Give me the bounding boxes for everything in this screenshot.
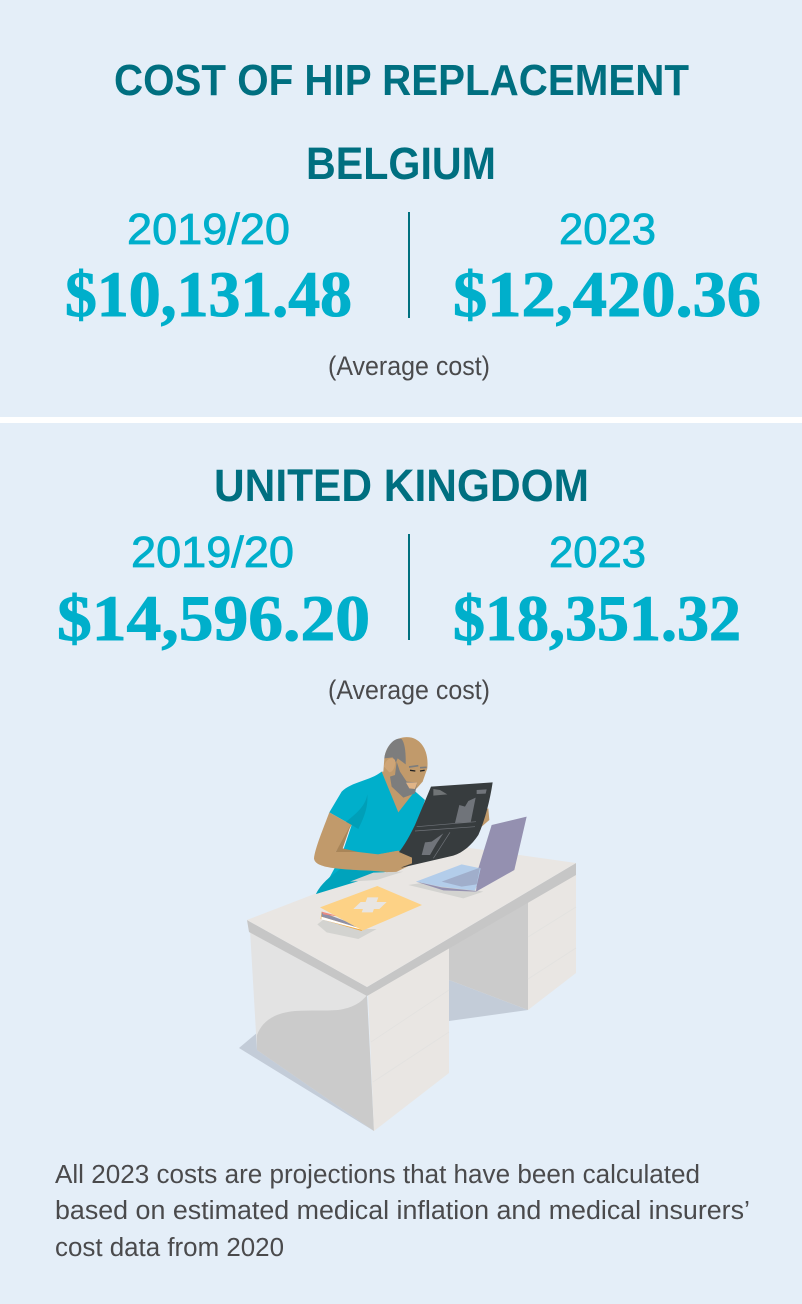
note: UK average cost: (Average cost): [328, 675, 490, 705]
year: Belgium 2023: 2023: [559, 205, 656, 254]
footnote: [55, 1161, 750, 1262]
year: Belgium 2019/20: 2019/20: [127, 205, 290, 254]
footnote: All 2023 costs are projections that have been calculated: [55, 1161, 700, 1189]
medical folder: [320, 886, 422, 931]
desk top: [247, 847, 576, 996]
x-ray film: [377, 782, 493, 873]
illustration: doctor at desk reading an x-ray: [239, 737, 576, 1131]
footnote: based on estimated medical inflation and medical insurers’: [55, 1197, 750, 1225]
divider: UK: [408, 534, 410, 640]
desk legs: [250, 870, 576, 1131]
footnote: cost data from 2020: [55, 1234, 284, 1262]
note: Belgium average cost: (Average cost): [328, 351, 490, 381]
price: Belgium 2023: $12,420.36: [453, 259, 761, 331]
title: COST OF HIP REPLACEMENT: [114, 56, 689, 105]
shadows on desk: [317, 872, 483, 939]
panel: United Kingdom: [57, 460, 741, 705]
year: UK 2023: 2023: [549, 528, 646, 577]
doctor: [314, 737, 428, 894]
price: Belgium 2019/20: $10,131.48: [65, 259, 352, 331]
desk shadow on floor: [239, 980, 528, 1131]
panel: Belgium: [65, 138, 761, 381]
price: UK 2023: $18,351.32: [453, 583, 741, 655]
divider: Belgium: [408, 212, 410, 318]
price: UK 2019/20: $14,596.20: [57, 583, 370, 655]
laptop: [416, 817, 527, 892]
heading: Belgium: BELGIUM: [306, 138, 496, 189]
heading: United Kingdom: UNITED KINGDOM: [214, 460, 589, 511]
year: UK 2019/20: 2019/20: [131, 528, 294, 577]
